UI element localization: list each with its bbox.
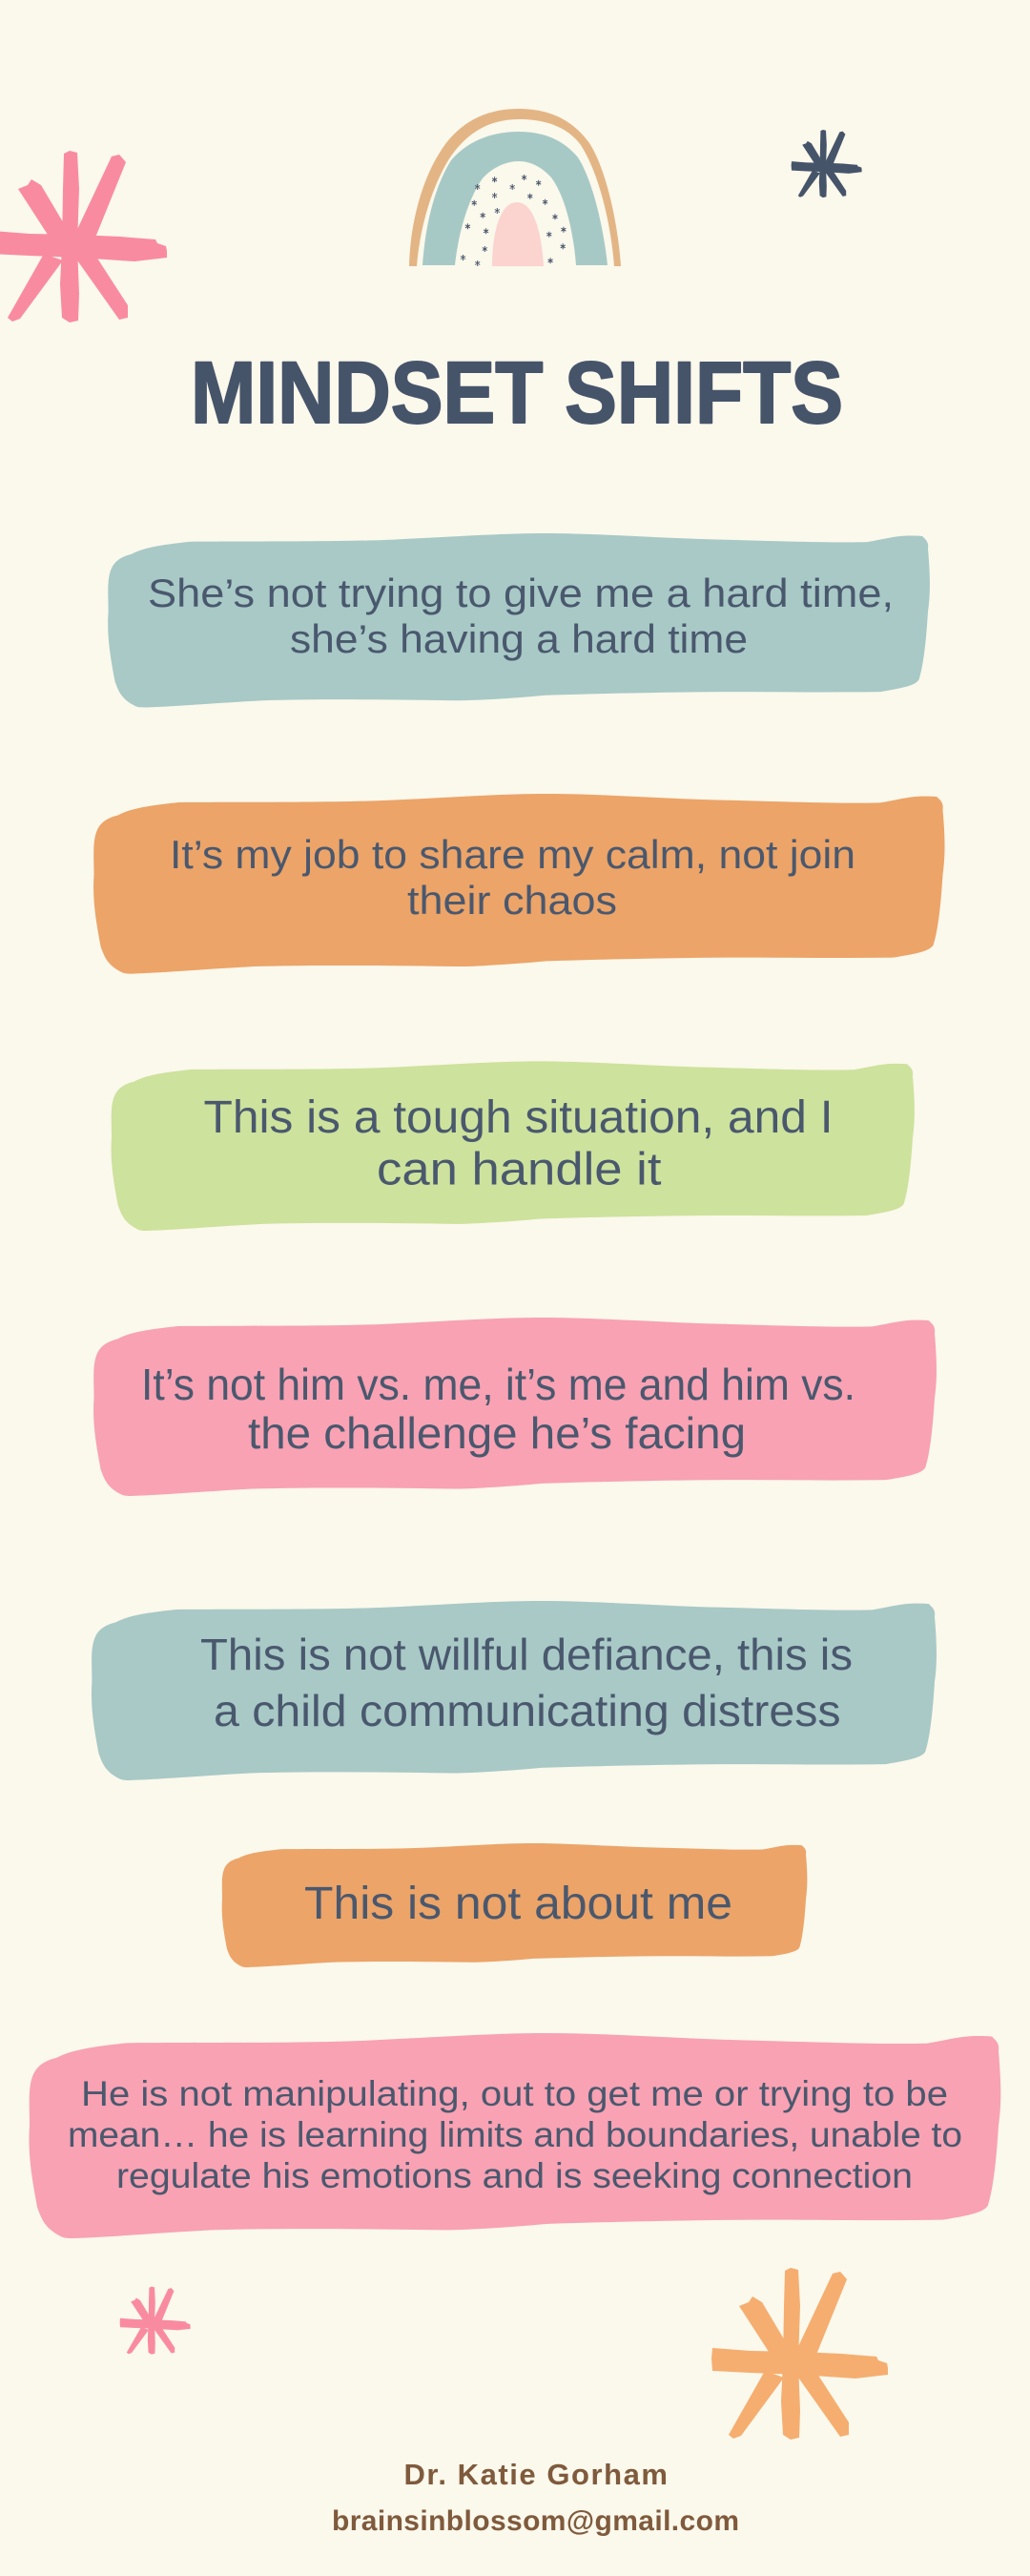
panel: not about me: This is not about me xyxy=(304,1879,732,1929)
panel: share my calm xyxy=(93,794,945,974)
panel: seeking connection: He is not manipulating, out to get me or trying to be xyxy=(81,2074,948,2113)
panel: tough situation: can handle it xyxy=(377,1145,662,1195)
icon: small pink star xyxy=(120,2287,191,2355)
panel: me and him xyxy=(93,1318,937,1496)
panel: share my calm: It’s my job to share my calm, not join xyxy=(170,832,855,877)
icon: rainbow xyxy=(409,109,621,266)
panel: not about me xyxy=(222,1843,807,1967)
panel: seeking connection xyxy=(29,2033,1000,2238)
panel: hard time xyxy=(108,533,930,708)
panel: me and him: It’s not him vs. me, it’s me and him vs. xyxy=(141,1360,855,1409)
icon: pink star top left xyxy=(0,151,167,322)
panel: me and him: the challenge he’s facing xyxy=(248,1408,746,1458)
panel: tough situation xyxy=(112,1061,915,1231)
panel: share my calm: their chaos xyxy=(407,878,617,923)
author name: Dr. Katie Gorham xyxy=(404,2458,668,2491)
panel: willful defiance: a child communicating distress xyxy=(214,1686,841,1735)
panel: seeking connection: mean… he is learning limits and boundaries, unable to xyxy=(68,2115,962,2154)
panel: seeking connection: regulate his emotions and is seeking connection xyxy=(116,2156,913,2195)
icon: dark star top right xyxy=(792,130,862,197)
panel: willful defiance: This is not willful defiance, this is xyxy=(200,1630,853,1679)
panel: hard time: she’s having a hard time xyxy=(290,616,748,661)
icon: orange star xyxy=(711,2268,888,2440)
panel: hard time: She’s not trying to give me a hard time, xyxy=(148,571,894,615)
title: MINDSET SHIFTS xyxy=(191,344,843,442)
panel: willful defiance xyxy=(92,1601,937,1780)
panel: tough situation: This is a tough situation, and I xyxy=(204,1092,834,1143)
author email: brainsinblossom@gmail.com xyxy=(332,2505,739,2537)
